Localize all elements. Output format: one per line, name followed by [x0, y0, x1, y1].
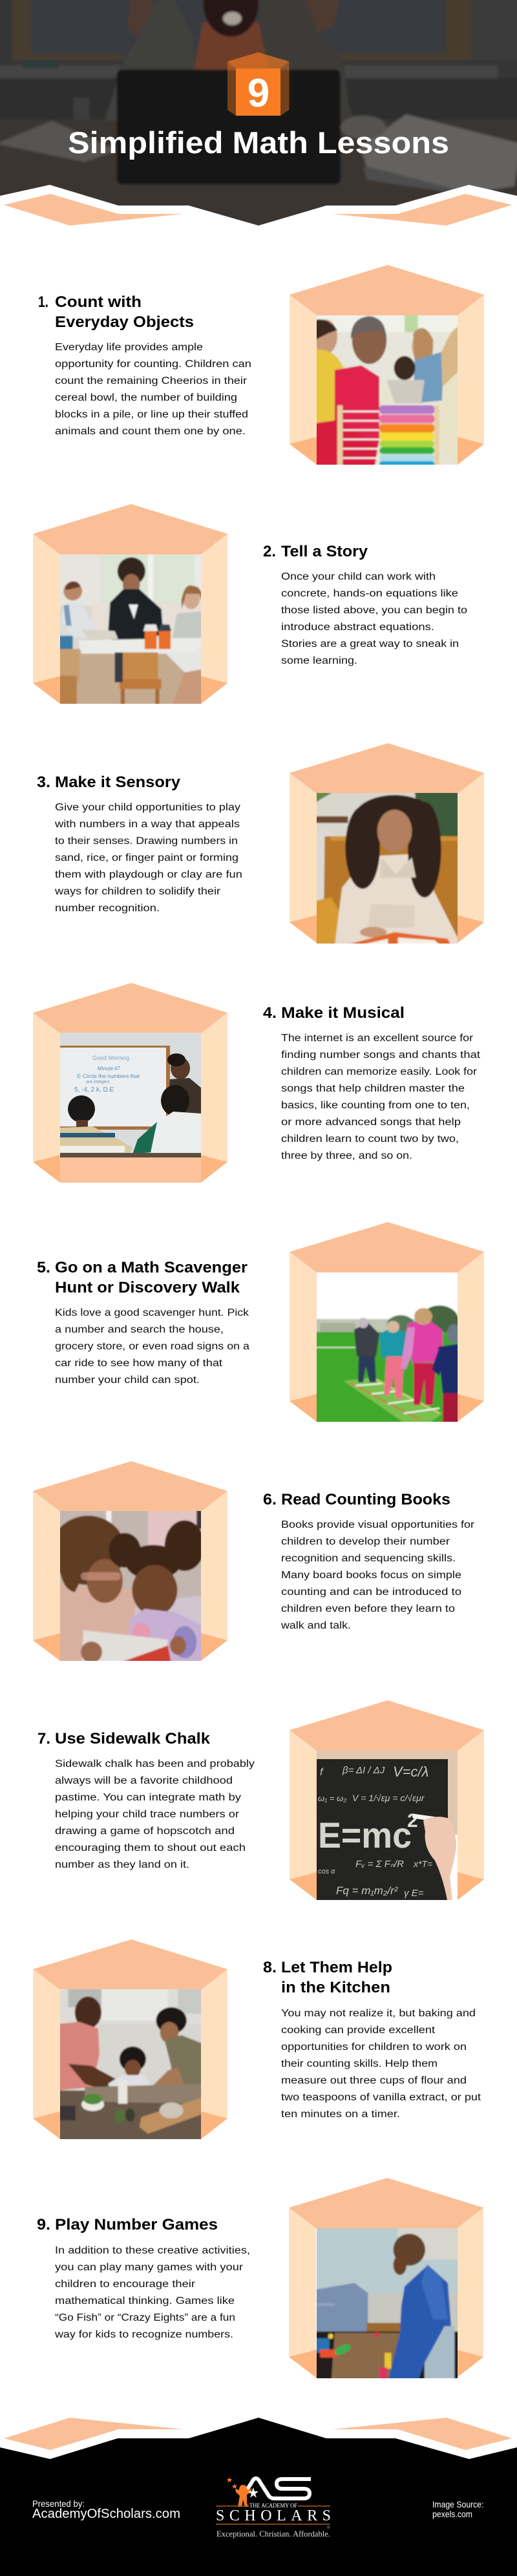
section 1 heading: [38, 293, 194, 331]
section 5 heading: Hunt or Discovery Walk: [55, 1279, 240, 1296]
section 2 body text: those listed above, you can begin to: [281, 605, 467, 616]
frame and photo: family in kitchen: [33, 1939, 227, 2142]
section 5 body text: car ride to see how many of that: [55, 1358, 223, 1369]
section 8 body text: cooking can provide excellent: [281, 2025, 436, 2036]
logo: academy of scholars: SCHOLARS: [216, 2507, 331, 2524]
title: Simplified Math Lessons: [68, 125, 449, 160]
section 8 heading: 8.: [263, 1959, 277, 1976]
section 9 body text: way for kids to recognize numbers.: [54, 2329, 233, 2340]
section 2 body text: introduce abstract equations.: [281, 622, 434, 633]
section 3 heading: Make it Sensory: [55, 774, 181, 791]
section 4 body text: [281, 1033, 481, 1161]
frame and photo: mother and daughter reading: [33, 1461, 227, 1663]
section 4: make it musical: [33, 983, 481, 1183]
section 6 heading: 6.: [263, 1491, 277, 1508]
section 3 body text: Give your child opportunities to play: [55, 802, 240, 813]
section 6 body text: recognition and sequencing skills.: [281, 1553, 456, 1564]
frame and photo: chalkboard equations: V = 1/√εμ = c/√εμr: [352, 1793, 425, 1803]
section 4 body text: basics, like counting from one to ten,: [281, 1100, 470, 1111]
section 1 heading: Count with: [55, 293, 142, 311]
section 7 body text: Sidewalk chalk has been and probably: [55, 1758, 255, 1769]
section 6 body text: counting and can be introduced to: [281, 1587, 461, 1598]
section 3 body text: ways for children to solidify their: [54, 886, 220, 897]
image source: Image Source:: [432, 2499, 483, 2509]
section 8 heading: in the Kitchen: [281, 1979, 390, 1996]
section 6 body text: children to develop their number: [281, 1536, 450, 1547]
section 5 body text: grocery store, or even road signs on a: [55, 1341, 249, 1352]
frame and photo: chalkboard equations: V=c/λ: [393, 1764, 428, 1780]
frame and photo: whiteboard classroom: Good Morning: [92, 1055, 129, 1061]
section 6 body text: walk and talk.: [280, 1620, 351, 1631]
frame and photo: chalkboard equations: Fᵥ = Σ Fₙ/R: [355, 1859, 404, 1870]
badge: number 9: 9: [248, 71, 269, 116]
peach chevron right: [332, 194, 512, 226]
section 7 body text: drawing a game of hopscotch and: [55, 1826, 235, 1837]
frame and photo: chalkboard equations: E=mc: [318, 1815, 412, 1855]
section 4 body text: children learn to count two by two,: [281, 1134, 459, 1145]
section 3: make it sensory: [37, 743, 484, 946]
section 7 body text: helping your child trace numbers or: [55, 1809, 239, 1820]
section 7 body text: [55, 1758, 255, 1870]
footer: [0, 2418, 517, 2576]
section 3 body text: them with playdough or clay are fun: [55, 869, 242, 880]
section 8 body text: measure out three cups of flour and: [281, 2075, 467, 2086]
section 8 body text: You may not realize it, but baking and: [281, 2008, 476, 2019]
section 5 body text: Kids love a good scavenger hunt. Pick: [55, 1307, 249, 1318]
section 1 body text: cereal bowl, the number of building: [55, 392, 237, 403]
frame and photo: chalkboard equations: [290, 1700, 484, 1900]
section 1: count with everyday objects: [38, 265, 484, 467]
section 5: math scavenger hunt: [37, 1222, 484, 1425]
frame and photo: chalkboard equations: β= ΔI / ΔJ: [342, 1765, 385, 1776]
section 2 body text: Stories are a great way to sneak in: [281, 639, 459, 649]
section 9 body text: “Go Fish” or “Crazy Eights” are a fun: [55, 2312, 235, 2323]
hero photo: woman at laptop: [0, 0, 517, 232]
frame and photo: whiteboard classroom: 5, -4, 2 k, D.E: [74, 1086, 114, 1093]
section 1 heading: Everyday Objects: [55, 313, 194, 331]
section 2 heading: Tell a Story: [281, 543, 368, 560]
section 1 body text: Everyday life provides ample: [55, 342, 203, 353]
frame and photo: chalkboard equations: γ E=: [404, 1888, 424, 1899]
frame and photo: whiteboard classroom: are integers: [86, 1080, 110, 1084]
presented by: AcademyOfScholars.com: [32, 2507, 180, 2521]
section 3 body text: [54, 802, 242, 914]
section 7: use sidewalk chalk: [37, 1700, 484, 1900]
footer black band: [0, 2418, 517, 2576]
section 7 heading: 7.: [37, 1730, 50, 1747]
frame and photo: whiteboard classroom: [33, 983, 227, 1183]
logo: academy of scholars: THE ACADEMY OF: [249, 2503, 297, 2509]
frame and photo: whiteboard classroom: Minute #7: [98, 1066, 121, 1072]
frame and photo: girl in armchair: [290, 743, 484, 946]
section 4 body text: three by three, and so on.: [281, 1150, 412, 1161]
section 6 body text: Books provide visual opportunities for: [281, 1519, 474, 1530]
image source: [432, 2499, 483, 2519]
section 3 body text: number recognition.: [55, 903, 160, 914]
section 7 heading: Use Sidewalk Chalk: [55, 1730, 211, 1747]
section 6: read counting books: [33, 1461, 474, 1663]
section 9 body text: you can play many games with your: [55, 2262, 243, 2273]
section 4 body text: or more advanced songs that help: [281, 1117, 461, 1128]
presented by: Presented by:: [32, 2498, 85, 2509]
section 2 body text: some learning.: [281, 655, 357, 666]
section 8 body text: two teaspoons of vanilla extract, or put: [281, 2092, 481, 2103]
section 3 body text: to their senses. Drawing numbers in: [55, 836, 238, 847]
frame and photo: chalkboard equations: x*T=: [413, 1859, 432, 1869]
section 2 heading: 2.: [263, 543, 276, 560]
section 7 body text: number as they land on it.: [55, 1859, 189, 1870]
section 9: play number games: [37, 2178, 483, 2381]
section 6 body text: children even before they learn to: [281, 1603, 455, 1614]
footer peach chevron right: [332, 2418, 512, 2450]
section 5 heading: Go on a Math Scavenger: [55, 1259, 248, 1276]
section 4 body text: The internet is an excellent source for: [281, 1033, 473, 1044]
section 4 heading: 4.: [263, 1004, 277, 1022]
frame and photo: chalkboard equations: 2: [407, 1810, 418, 1832]
frame and photo: boy with number toys: [289, 2178, 483, 2381]
section 5 heading: 5.: [37, 1259, 50, 1276]
section 8 heading: Let Them Help: [281, 1959, 392, 1976]
section 8 heading: [263, 1959, 392, 1996]
logo: academy of scholars: ®: [327, 2526, 330, 2530]
badge: number 9: [227, 52, 290, 116]
section 8: let them help in the kitchen: [33, 1939, 481, 2142]
peach chevron left: [4, 194, 183, 226]
section 8 body text: their counting skills. Help them: [281, 2058, 438, 2069]
section 1 heading: 1.: [38, 293, 48, 311]
section 9 body text: [54, 2245, 250, 2340]
section 3 body text: sand, rice, or finger paint or forming: [55, 852, 238, 863]
footer peach chevron left: [4, 2418, 183, 2450]
header banner: [0, 0, 517, 232]
frame and photo: whiteboard classroom: ① Circle the numbers that: [76, 1073, 140, 1079]
section 4 body text: songs that help children master the: [281, 1083, 465, 1094]
frame and photo: children on field: [290, 1222, 484, 1425]
section 5 body text: a number and search the house,: [55, 1324, 224, 1335]
section 8 body text: [281, 2008, 481, 2120]
logo: academy of scholars: [216, 2477, 331, 2539]
section 1 body text: [55, 342, 251, 437]
section 3 heading: 3.: [37, 774, 50, 791]
logo: academy of scholars: Exceptional. Christian. Affordable.: [216, 2529, 330, 2539]
section 4 heading: Make it Musical: [281, 1004, 405, 1022]
section 4 body text: finding number songs and chants that: [281, 1050, 481, 1061]
section 8 body text: ten minutes on a timer.: [281, 2109, 400, 2120]
section 5 body text: [55, 1307, 249, 1386]
section 2 body text: [281, 571, 467, 666]
section 9 heading: 9.: [37, 2216, 50, 2233]
frame and photo: teacher with children: [33, 504, 227, 706]
section 4 body text: children can memorize easily. Look for: [281, 1066, 477, 1077]
section 7 body text: encouraging them to shout out each: [55, 1842, 246, 1853]
section 1 body text: count the remaining Cheerios in their: [55, 375, 247, 386]
section 6 body text: [280, 1519, 474, 1631]
frame and photo: chalkboard equations: f: [320, 1767, 324, 1778]
section 6 body text: Many board books focus on simple: [281, 1570, 461, 1581]
section 7 body text: pastime. You can integrate math by: [55, 1792, 241, 1803]
section 9 heading: Play Number Games: [55, 2216, 218, 2233]
section 2: tell a story: [33, 504, 467, 706]
frame and photo: chalkboard equations: cos α: [318, 1868, 335, 1875]
section 2 body text: concrete, hands-on equations like: [281, 588, 458, 599]
image source: pexels.com: [432, 2509, 472, 2519]
section 2 body text: Once your child can work with: [281, 571, 436, 582]
frame and photo: child with abacus: [290, 265, 484, 467]
section 1 body text: blocks in a pile, or line up their stuffed: [55, 409, 248, 420]
section 6 heading: Read Counting Books: [281, 1491, 450, 1508]
section 8 body text: opportunities for children to work on: [281, 2042, 467, 2053]
frame and photo: chalkboard equations: Fq = m₁m₂/r²: [336, 1884, 399, 1897]
section 7 body text: always will be a favorite childhood: [55, 1775, 233, 1786]
section 5 body text: number your child can spot.: [55, 1375, 200, 1386]
section 3 body text: with numbers in a way that appeals: [54, 819, 240, 830]
section 1 body text: animals and count them one by one.: [55, 426, 246, 437]
section 9 body text: children to encourage their: [55, 2279, 195, 2290]
frame and photo: chalkboard equations: ω₁ = ω₂: [318, 1793, 346, 1803]
presented by: [32, 2498, 180, 2521]
section 1 body text: opportunity for counting. Children can: [55, 359, 251, 370]
section 9 body text: mathematical thinking. Games like: [55, 2296, 235, 2307]
section 5 heading: [37, 1259, 248, 1296]
section 9 body text: In addition to these creative activities,: [55, 2245, 250, 2256]
